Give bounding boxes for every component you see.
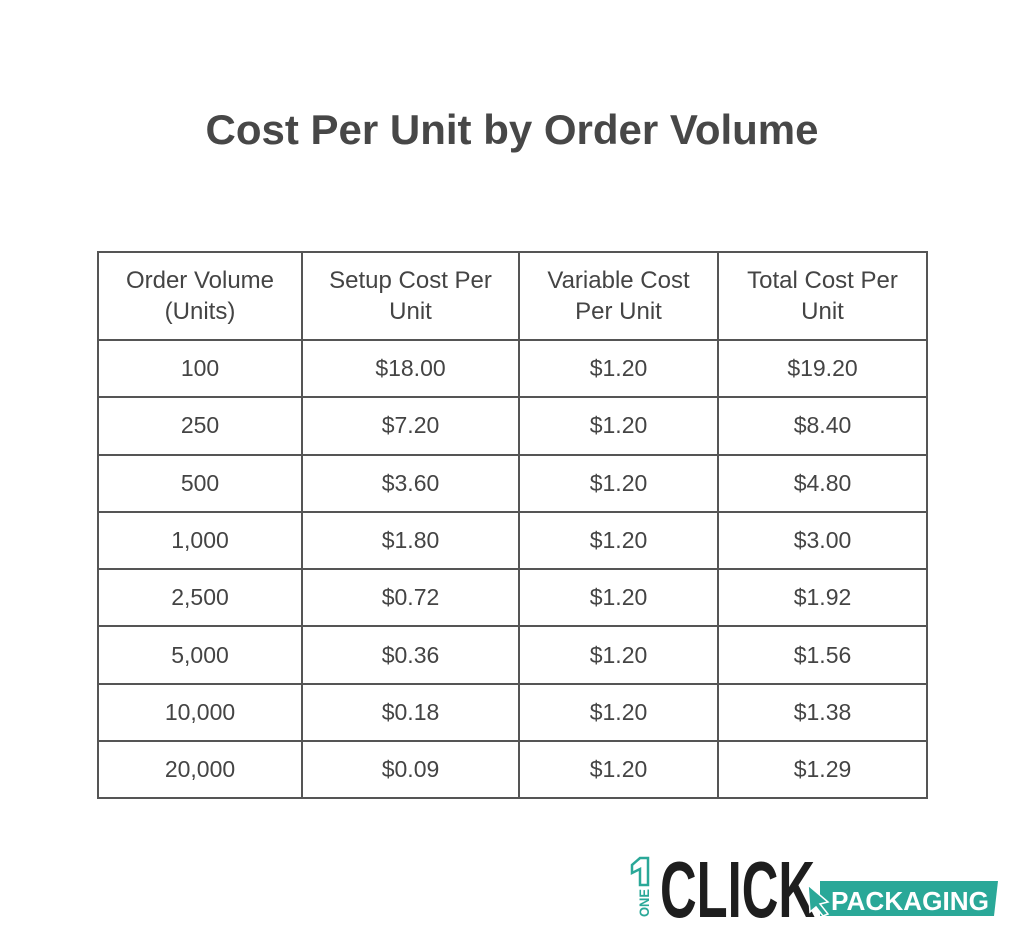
table: cost per unit: Setup Cost Per xyxy=(329,267,492,294)
table: cost per unit: $1.20 xyxy=(590,355,647,381)
table: cost per unit: $1.56 xyxy=(794,642,851,668)
table: cost per unit: $0.09 xyxy=(382,756,439,782)
table: cost per unit: 250 xyxy=(181,412,219,438)
table: cost per unit: 500 xyxy=(181,470,219,496)
table: cost per unit: $4.80 xyxy=(794,470,851,496)
table: cost per unit: (Units) xyxy=(165,298,235,325)
table: cost per unit: $1.20 xyxy=(590,470,647,496)
table: cost per unit: $8.40 xyxy=(794,412,851,438)
table: cost per unit: $3.00 xyxy=(794,527,851,553)
table: cost per unit: $1.38 xyxy=(794,699,851,725)
table: cost per unit: 5,000 xyxy=(171,642,229,668)
table: cost per unit: Unit xyxy=(389,298,432,325)
table: cost per unit: $1.80 xyxy=(382,527,439,553)
table: cost per unit: $19.20 xyxy=(787,355,858,381)
icon: one xyxy=(632,858,652,917)
icon: one: ONE xyxy=(636,889,652,917)
table: cost per unit: $1.92 xyxy=(794,584,851,610)
table: cost per unit: $18.00 xyxy=(375,355,446,381)
table: cost per unit: Variable Cost xyxy=(547,267,690,294)
table: cost per unit: 100 xyxy=(181,355,219,381)
banner: packaging: PACKAGING xyxy=(831,886,989,916)
table: cost per unit: $1.20 xyxy=(590,584,647,610)
table: cost per unit: Order Volume xyxy=(126,267,274,294)
table: cost per unit: Total Cost Per xyxy=(747,267,898,294)
logo: One Click Packaging xyxy=(630,855,998,920)
table: cost per unit: $7.20 xyxy=(382,412,439,438)
table: cost per unit: Unit xyxy=(801,298,844,325)
table: cost per unit: $1.20 xyxy=(590,642,647,668)
table: cost per unit: 2,500 xyxy=(171,584,229,610)
table: cost per unit: $3.60 xyxy=(382,470,439,496)
table: cost per unit: Per Unit xyxy=(575,298,662,325)
table: cost per unit: $0.72 xyxy=(382,584,439,610)
table: cost per unit: $1.20 xyxy=(590,412,647,438)
title: Cost Per Unit by Order Volume xyxy=(206,106,818,153)
table: cost per unit: 20,000 xyxy=(165,756,235,782)
table: cost per unit: $1.20 xyxy=(590,527,647,553)
table: cost per unit: $1.20 xyxy=(590,699,647,725)
table: cost per unit: 10,000 xyxy=(165,699,235,725)
table: cost per unit: $1.20 xyxy=(590,756,647,782)
table: cost per unit: $0.36 xyxy=(382,642,439,668)
table: cost per unit xyxy=(97,251,928,799)
table: cost per unit: 1,000 xyxy=(171,527,229,553)
table: cost per unit: $0.18 xyxy=(382,699,439,725)
table: cost per unit: $1.29 xyxy=(794,756,851,782)
